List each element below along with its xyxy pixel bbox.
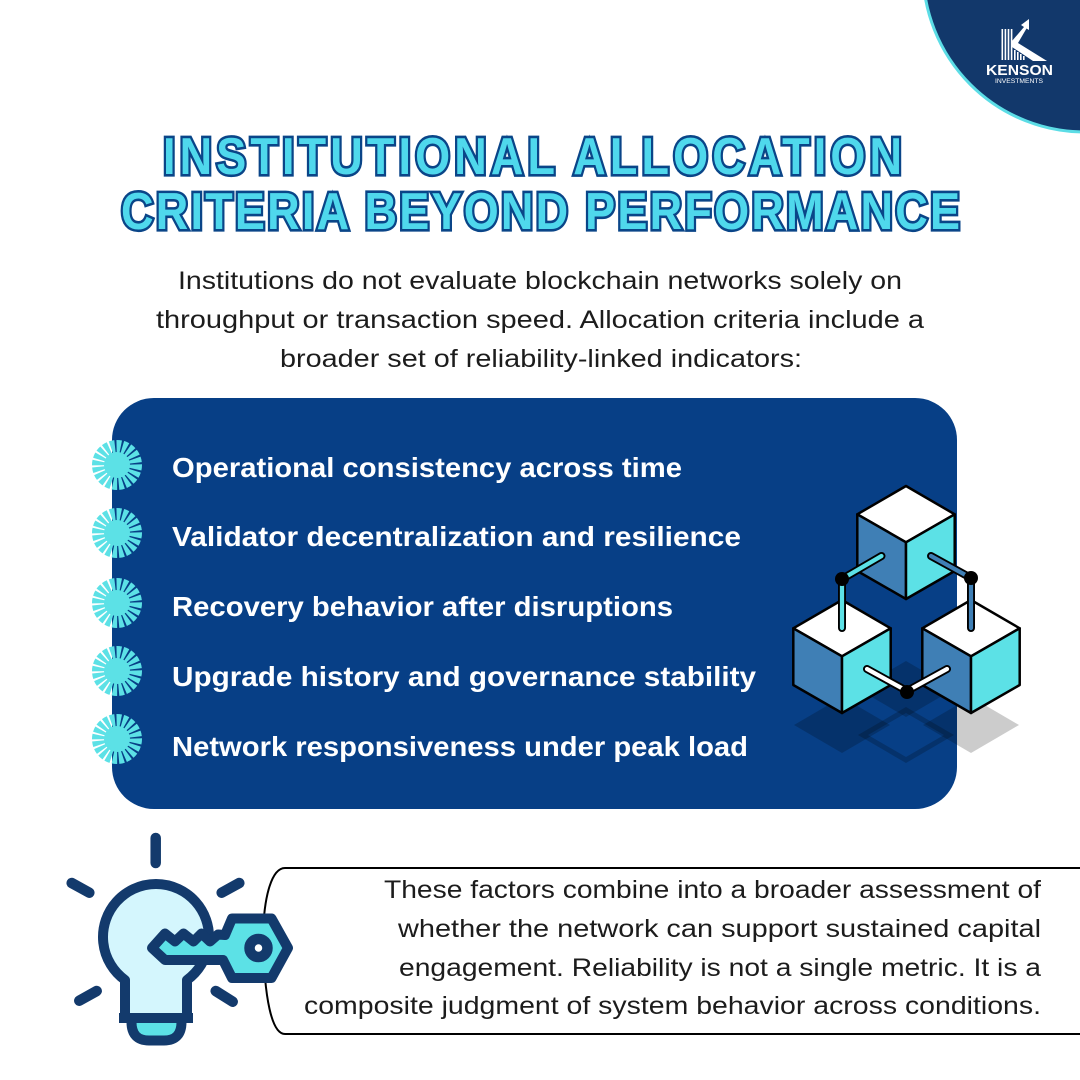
intro text: Institutions do not evaluate blockchain networks solely on (178, 267, 902, 295)
intro text: throughput or transaction speed. Allocation criteria include a (156, 306, 924, 334)
title: CRITERIA BEYOND PERFORMANCE (121, 183, 960, 241)
key hole (250, 939, 268, 957)
right cube (922, 600, 1020, 713)
icon: connected blockchain cubes (793, 486, 1020, 763)
list items (172, 452, 757, 762)
left cube (793, 600, 891, 713)
key (152, 918, 288, 978)
logo mark (1002, 19, 1047, 61)
callout box (263, 868, 1080, 1034)
list items: Operational consistency across time (172, 452, 682, 483)
top cube (857, 486, 955, 599)
connectors (842, 556, 971, 691)
title (121, 128, 960, 241)
title: INSTITUTIONAL ALLOCATION (163, 128, 902, 186)
logo wordmark: KENSON (986, 62, 1053, 79)
callout text: composite judgment of system behavior across conditions. (304, 992, 1041, 1020)
intro text: broader set of reliability-linked indicators: (280, 345, 802, 373)
panel: criteria list (112, 398, 957, 809)
bulb base (132, 1018, 182, 1040)
title: INSTITUTIONAL ALLOCATION (163, 128, 902, 186)
icon: light bulb with key (72, 838, 288, 1040)
list items: Upgrade history and governance stability (172, 661, 757, 692)
connector nodes (835, 571, 978, 699)
callout text (304, 876, 1041, 1020)
intro text (156, 267, 924, 373)
corner logo badge (923, 0, 1080, 132)
light rays (72, 838, 239, 1002)
bulb glass (103, 884, 209, 1018)
base bar (119, 1013, 193, 1023)
callout text: engagement. Reliability is not a single metric. It is a (399, 954, 1041, 982)
callout text: whether the network can support sustained capital (397, 915, 1041, 943)
cube shadows (794, 661, 1019, 763)
list items: Network responsiveness under peak load (172, 731, 748, 762)
list items: Recovery behavior after disruptions (172, 591, 673, 622)
callout text: These factors combine into a broader assessment of (384, 876, 1041, 904)
list items: Validator decentralization and resilience (172, 521, 741, 552)
logo subtitle: INVESTMENTS (995, 79, 1043, 85)
title: CRITERIA BEYOND PERFORMANCE (121, 183, 960, 241)
bullet icons (100, 448, 134, 756)
